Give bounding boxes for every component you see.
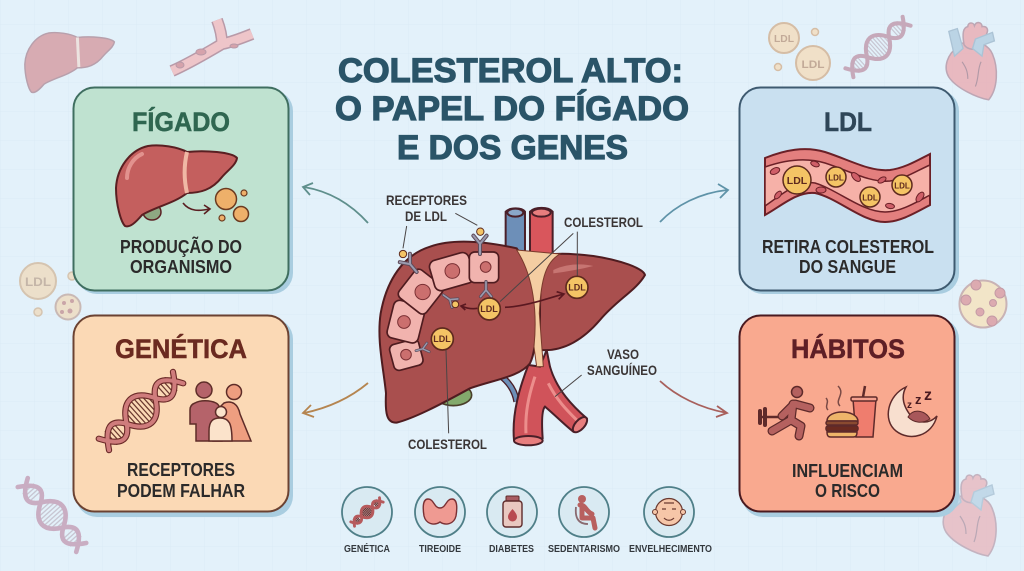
heading: genética: GENÉTICA — [115, 333, 247, 364]
risk factor: genética: GENÉTICA — [344, 542, 390, 555]
decorative heart watermark top right — [946, 23, 996, 100]
arrow: to genética — [303, 383, 368, 417]
caption: influenciam o risco: O RISCO — [815, 481, 880, 501]
liver cells — [386, 251, 499, 372]
liver lobes — [379, 242, 536, 423]
risk factor: tireoide: TIREOIDE — [419, 543, 461, 555]
decorative liver watermark — [25, 33, 114, 93]
decorative heart watermark bottom right — [943, 475, 996, 556]
caption: produção do organismo — [120, 236, 242, 277]
caption: receptores podem falhar — [117, 460, 245, 501]
panel: genética — [74, 316, 293, 517]
leader lines — [403, 213, 582, 433]
icon: blood vessel with LDL: LDL — [787, 175, 808, 187]
label: receptores de LDL: DE LDL — [405, 208, 447, 224]
icon: liver with particles — [116, 145, 248, 226]
risk factor: sedentarismo: SEDENTARISMO — [548, 543, 620, 555]
LDL particle labels: LDL — [480, 304, 498, 314]
risk factor: diabetes: DIABETES — [489, 543, 534, 555]
LDL particles — [431, 276, 588, 350]
label: vaso sanguíneo: VASO — [607, 346, 639, 362]
icon: moon and zzz: z — [924, 387, 932, 404]
receptors — [400, 236, 491, 355]
LDL particle labels: LDL — [568, 282, 586, 292]
decorative LDL watermarks top right — [769, 23, 830, 80]
icon: blood vessel with LDL — [765, 149, 930, 222]
risk factor: genética — [342, 487, 392, 555]
decorative blood vessel watermark — [172, 20, 252, 71]
title: E DOS GENES — [397, 129, 628, 167]
risk factor: sedentarismo — [548, 487, 620, 555]
icon: blood vessel with LDL: LDL — [894, 182, 910, 190]
label: vaso sanguíneo: SANGUÍNEO — [587, 362, 657, 378]
falciform ligament — [517, 250, 560, 367]
caption: retira colesterol do sangue: RETIRA COLESTEROL — [762, 237, 934, 257]
label: colesterol top: COLESTEROL — [564, 214, 643, 230]
label: receptores de LDL: RECEPTORES — [386, 192, 467, 208]
decorative LDL watermarks left — [20, 263, 80, 320]
LDL arrows — [461, 292, 564, 310]
icon: moon and zzz: z — [907, 400, 912, 411]
central liver diagram — [379, 208, 645, 445]
icon: blood vessel with LDL: LDL — [828, 174, 844, 182]
heading: fígado: FÍGADO — [132, 106, 230, 137]
decorative LDL watermarks top right: LDL — [802, 59, 825, 71]
decorative cell watermark right — [960, 280, 1006, 328]
caption: influenciam o risco: INFLUENCIAM — [792, 461, 903, 481]
icon: DNA helix — [93, 366, 189, 456]
gallbladder — [435, 384, 472, 406]
label: colesterol bottom: COLESTEROL — [408, 436, 487, 452]
arrow: to LDL — [660, 184, 728, 222]
icon: moon and zzz — [888, 387, 937, 436]
decorative DNA watermark bottom left — [12, 473, 92, 557]
decorative LDL watermarks left: LDL — [25, 275, 51, 289]
caption: receptores podem falhar: PODEM FALHAR — [117, 481, 245, 501]
label: vaso sanguíneo — [587, 346, 657, 378]
decorative DNA watermark top right — [841, 12, 915, 82]
risk factor: envelhecimento — [629, 487, 712, 555]
risk factor: diabetes — [487, 487, 537, 555]
caption: retira colesterol do sangue — [762, 237, 934, 277]
icon: family — [190, 382, 251, 441]
caption: retira colesterol do sangue: DO SANGUE — [799, 257, 896, 277]
risk factor: tireoide — [415, 487, 465, 555]
lower blood vessel — [514, 350, 590, 445]
risk factor: envelhecimento: ENVELHECIMENTO — [629, 543, 712, 555]
arrow: to hábitos — [660, 381, 727, 417]
heading: hábitos: HÁBITOS — [791, 333, 905, 364]
small vein — [502, 377, 517, 402]
caption: produção do organismo: ORGANISMO — [130, 257, 232, 277]
LDL particle labels — [433, 282, 586, 344]
title — [335, 52, 689, 167]
caption: receptores podem falhar: RECEPTORES — [127, 460, 235, 480]
panel: fígado — [74, 88, 293, 294]
arrow: to fígado — [303, 183, 368, 223]
title: O PAPEL DO FÍGADO — [335, 90, 689, 128]
decorative LDL watermarks top right: LDL — [774, 34, 794, 45]
caption: produção do organismo: PRODUÇÃO DO — [120, 236, 242, 257]
icon: burger and drink — [826, 386, 877, 437]
icon: running with dumbbell — [760, 386, 810, 436]
LDL particle labels: LDL — [433, 334, 451, 344]
panel: LDL — [740, 88, 959, 294]
label: receptores de LDL — [386, 192, 467, 224]
title: COLESTEROL ALTO: — [338, 52, 683, 90]
caption: influenciam o risco — [792, 461, 903, 501]
panel: hábitos — [740, 316, 959, 517]
icon: moon and zzz: z — [915, 392, 922, 407]
heading: LDL: LDL — [824, 107, 872, 137]
top blood vessels — [506, 208, 553, 257]
icon: blood vessel with LDL: LDL — [862, 194, 878, 202]
